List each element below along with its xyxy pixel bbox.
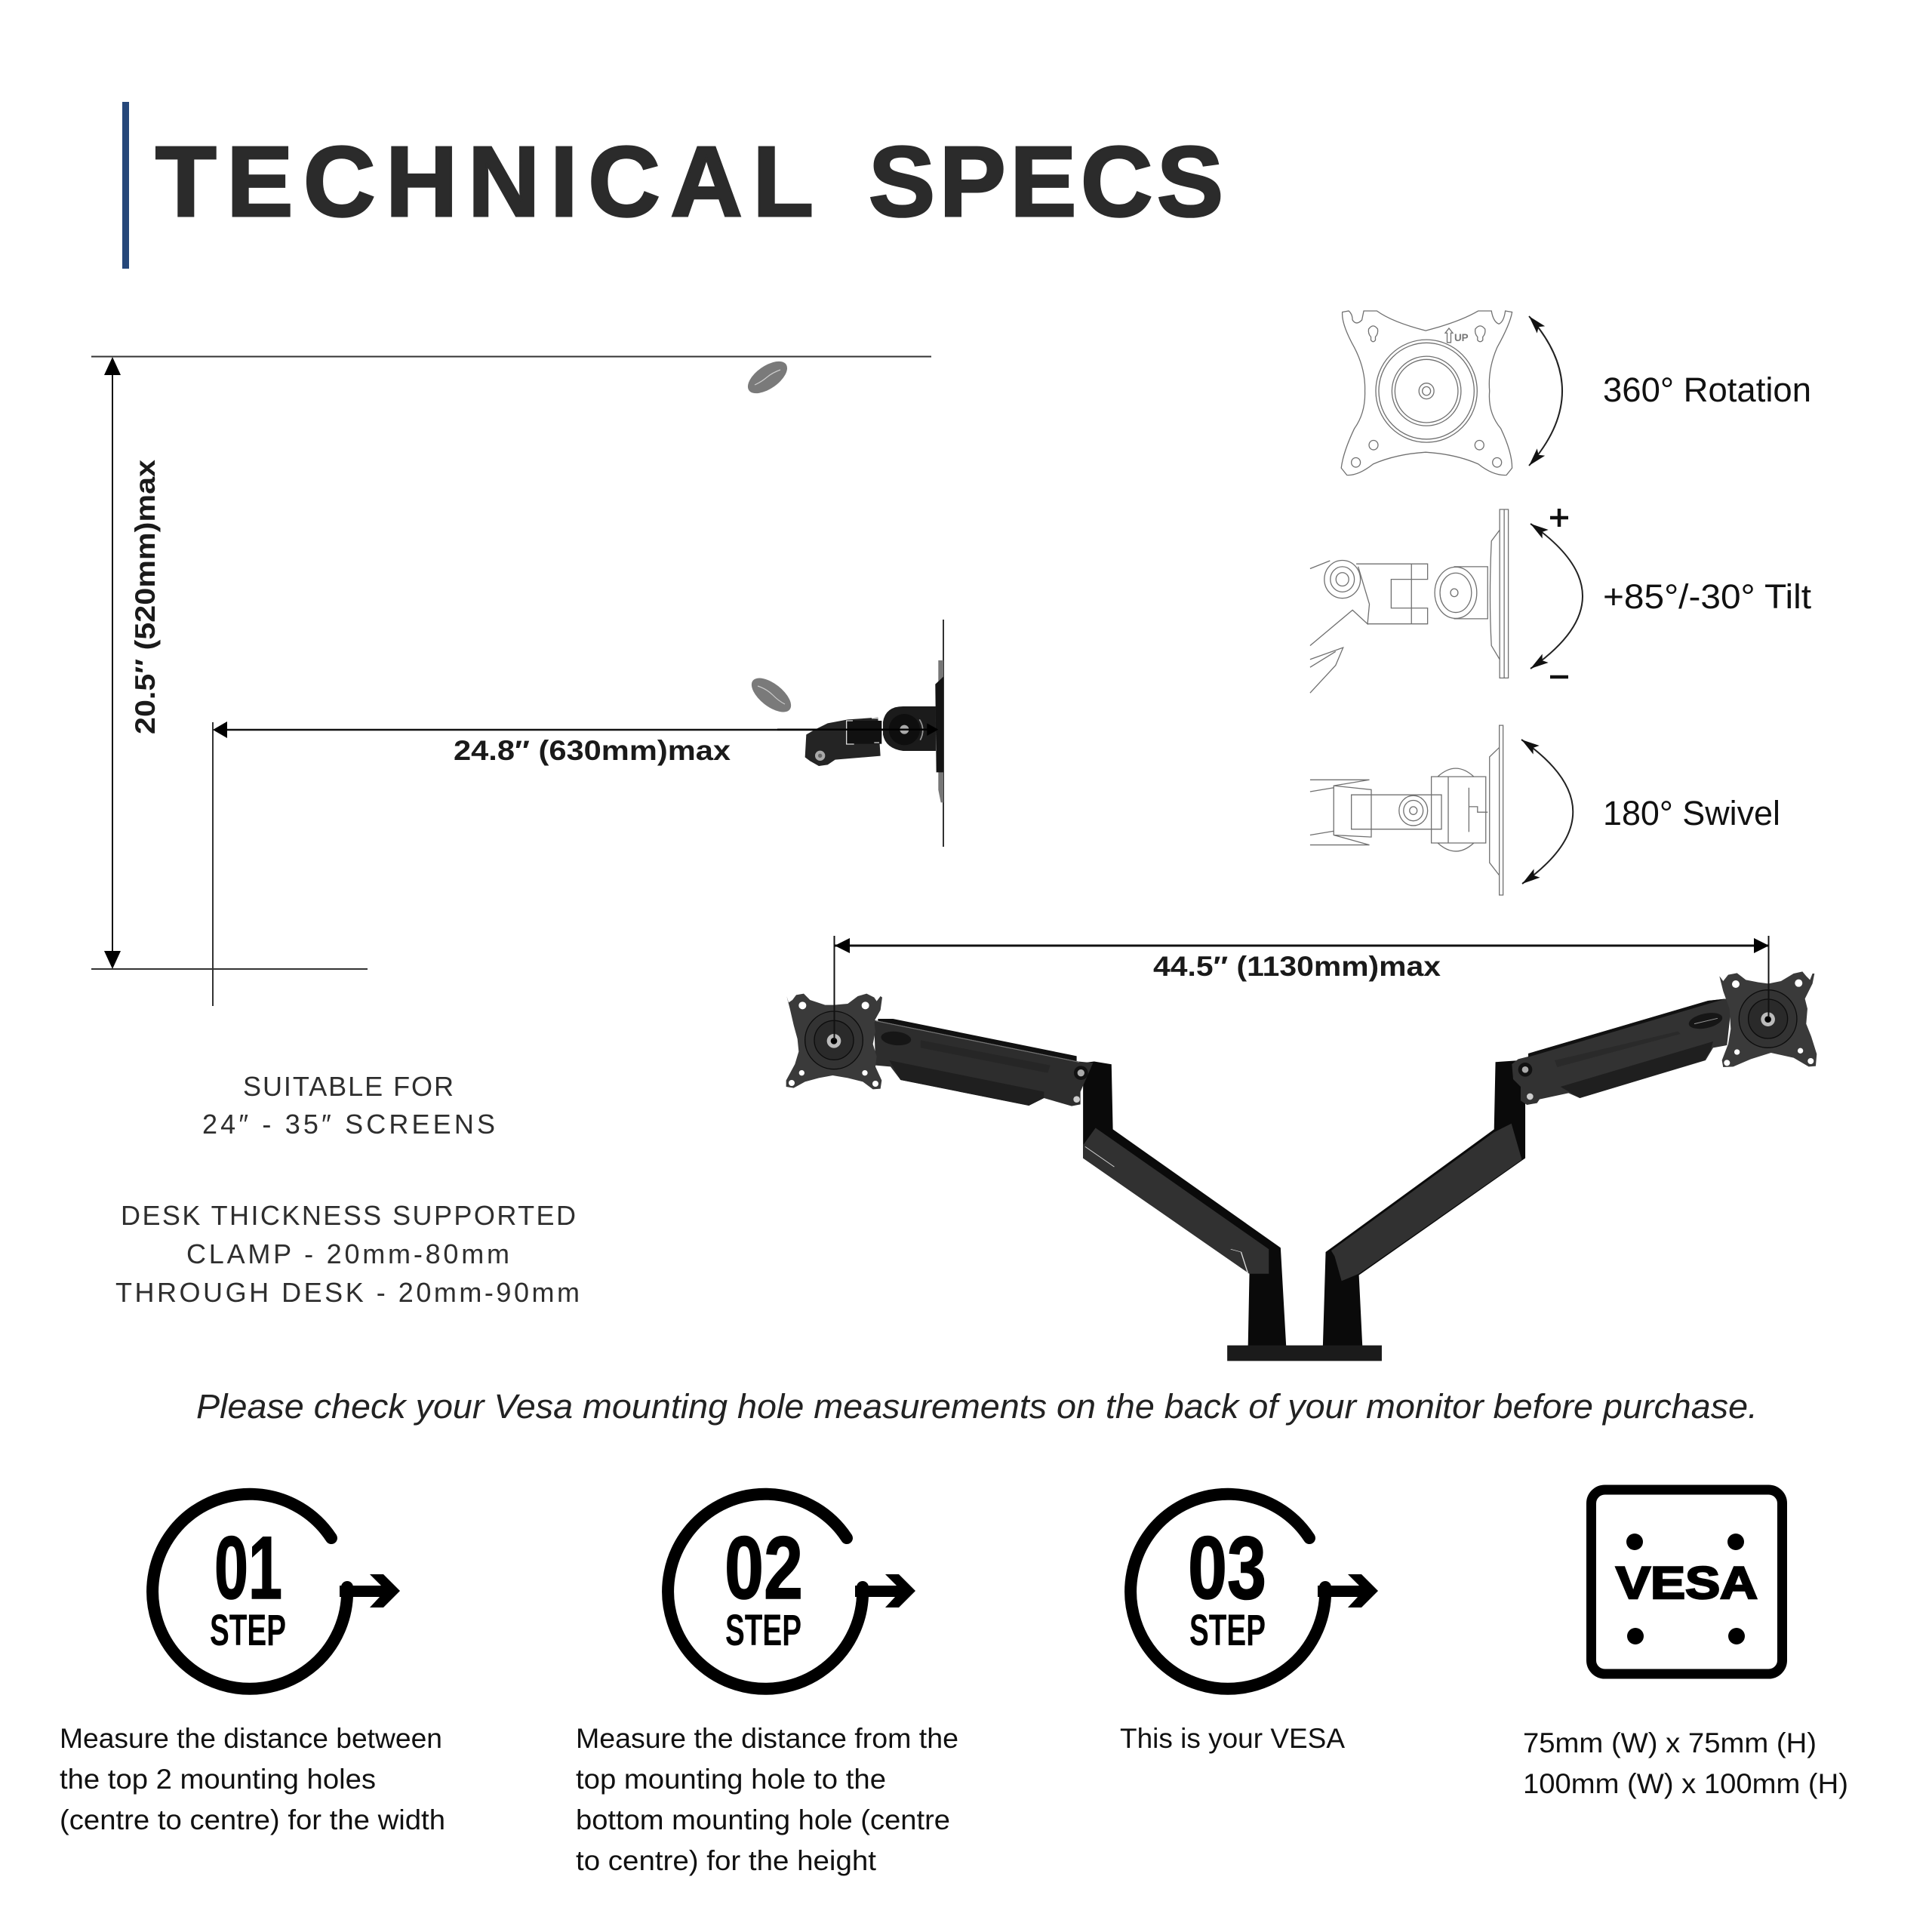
step 2 text: top mounting hole to the xyxy=(576,1764,886,1795)
height and reach dimension diagram xyxy=(91,355,943,1006)
screen size note: SUITABLE FOR xyxy=(243,1071,454,1102)
step 2 icon: STEP xyxy=(725,1606,801,1655)
reach origin line xyxy=(212,722,214,1006)
width dimension xyxy=(835,938,1769,982)
desk thickness note: THROUGH DESK - 20mm-90mm xyxy=(115,1277,580,1308)
reach arrow xyxy=(213,721,930,738)
left VESA plate xyxy=(786,994,882,1089)
top limit line xyxy=(91,356,931,358)
rotation label: 360° Rotation xyxy=(1603,371,1811,409)
VESA icon xyxy=(1591,1490,1783,1674)
VESA sizes xyxy=(1523,1727,1848,1799)
step 1 icon: 01 xyxy=(214,1518,282,1618)
tilt illustration: side view xyxy=(1310,509,1509,693)
monitor plane line xyxy=(943,620,944,847)
right column and forearm xyxy=(1323,1060,1525,1346)
VESA sizes: 100mm (W) x 100mm (H) xyxy=(1523,1768,1848,1799)
screen size note: 24″ - 35″ SCREENS xyxy=(202,1109,495,1140)
width label: 44.5″ (1130mm)max xyxy=(1153,951,1441,982)
lower arms and base xyxy=(1083,1060,1525,1361)
logo badge top xyxy=(743,355,792,399)
tilt arrow xyxy=(1531,524,1583,669)
height label: 20.5″ (520mm)max xyxy=(130,460,161,734)
desk thickness note: CLAMP - 20mm-80mm xyxy=(186,1238,509,1269)
step 2 text: bottom mounting hole (centre xyxy=(576,1804,950,1835)
tilt label: +85°/-30° Tilt xyxy=(1603,577,1812,616)
step 1 icon: STEP xyxy=(210,1606,286,1655)
step 1 text: (centre to centre) for the width xyxy=(60,1804,445,1835)
dual monitor arm product illustration xyxy=(786,936,1817,1361)
right upper arm xyxy=(1512,971,1817,1105)
desk thickness note: DESK THICKNESS SUPPORTED xyxy=(121,1200,576,1231)
title accent bar xyxy=(122,102,129,269)
reach label: 24.8″ (630mm)max xyxy=(454,735,731,766)
screen size note xyxy=(202,1071,495,1140)
width arrow xyxy=(835,938,1769,953)
logo badge bottom xyxy=(746,672,797,718)
left column and forearm xyxy=(1083,1061,1286,1346)
VESA sizes: 75mm (W) x 75mm (H) xyxy=(1523,1727,1817,1758)
tilt minus sign xyxy=(1550,675,1568,678)
step 3 icon: STEP xyxy=(1189,1606,1266,1655)
side view of monitor arm head xyxy=(777,660,943,802)
step 2 icon xyxy=(668,1494,915,1689)
bottom limit line xyxy=(91,968,368,970)
left centre line xyxy=(833,936,835,1040)
step 1 icon xyxy=(152,1494,400,1689)
VESA check notice: Please check your Vesa mounting hole measurements on the back of your monitor before purchase. xyxy=(196,1387,1758,1426)
title: SPECS xyxy=(869,126,1223,237)
left upper arm xyxy=(786,994,1093,1106)
right VESA plate xyxy=(1719,971,1817,1067)
step 2 text: Measure the distance from the xyxy=(576,1723,958,1754)
step 1 text xyxy=(60,1723,445,1835)
compatibility notes xyxy=(115,1071,580,1308)
step 3 icon xyxy=(1131,1494,1378,1689)
height arrow xyxy=(104,357,121,969)
rotation illustration: VESA plate xyxy=(1341,311,1512,475)
step 3 text: This is your VESA xyxy=(1120,1723,1345,1754)
step 2 icon: 02 xyxy=(724,1518,803,1618)
title xyxy=(155,126,1223,237)
rotation arrow xyxy=(1529,316,1562,466)
VESA icon: VESA xyxy=(1616,1558,1758,1608)
step 1 text: the top 2 mounting holes xyxy=(60,1764,376,1795)
step 2 text: to centre) for the height xyxy=(576,1845,877,1876)
swivel arrow xyxy=(1521,740,1573,884)
right centre line xyxy=(1767,936,1769,1017)
title: TECHNICAL xyxy=(155,126,814,237)
step 3 icon: 03 xyxy=(1188,1518,1266,1618)
desk thickness note xyxy=(115,1200,580,1308)
swivel illustration: top view xyxy=(1310,725,1503,895)
tilt plus sign xyxy=(1550,509,1568,527)
step 1 text: Measure the distance between xyxy=(60,1723,442,1754)
desk clamp base xyxy=(1227,1346,1382,1361)
rotation illustration: VESA plate: UP xyxy=(1454,332,1469,343)
step 2 text xyxy=(576,1723,958,1876)
swivel label: 180° Swivel xyxy=(1603,794,1780,832)
